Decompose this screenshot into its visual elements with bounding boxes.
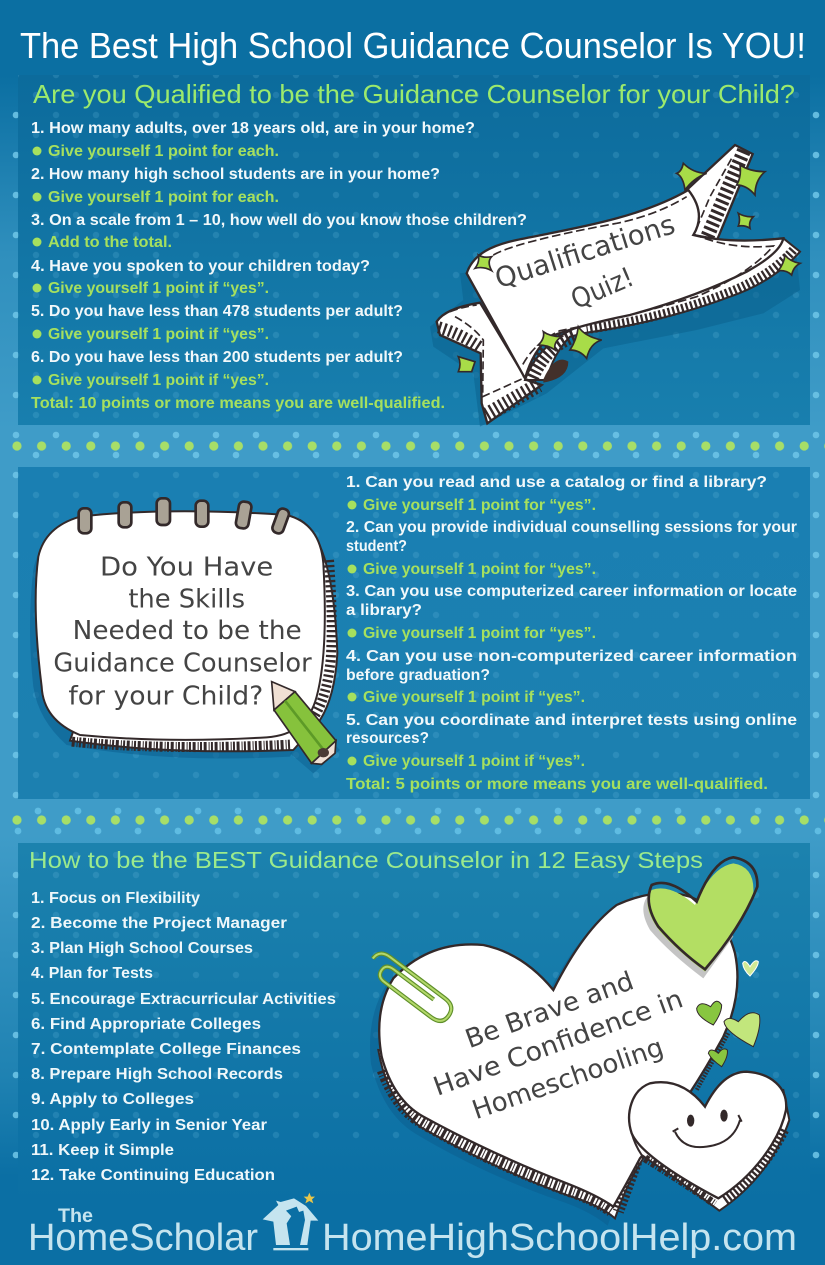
notebook text: Do You Have (100, 553, 273, 583)
main heart shadow (370, 900, 730, 1226)
quiz questions list: Add to the total. (48, 234, 172, 251)
connector strings (697, 1033, 728, 1090)
skills questions list (346, 474, 797, 793)
notebook: Do You Have the Skills (30, 498, 340, 773)
skills questions list: Give yourself 1 point for “yes”. (363, 625, 596, 642)
notebook text: the Skills (128, 584, 245, 614)
dotted divider: first (0, 440, 825, 452)
skills questions list: a library? (346, 602, 422, 619)
hearts illustration (366, 857, 789, 1226)
small green hearts (697, 961, 760, 1067)
ribbon shadow (430, 240, 800, 427)
heart text: Have Confidence in (429, 984, 687, 1103)
green sparkles (458, 163, 800, 372)
quiz questions list: 4. Have you spoken to your children today? (31, 258, 370, 275)
skills questions list: 3. Can you use computerized career information or locate (346, 583, 797, 600)
quiz questions list: Total: 10 points or more means you are well-qualified. (31, 395, 445, 412)
heart text (429, 966, 687, 1126)
quiz questions list: Give yourself 1 point for each. (48, 189, 279, 206)
quiz questions list: 1. How many adults, over 18 years old, are in your home? (31, 120, 475, 137)
curl shadow (543, 360, 568, 383)
ribbon: Qualifications Quiz (430, 145, 800, 427)
skills questions list: 1. Can you read and use a catalog or find a library? (346, 474, 767, 491)
quiz questions list: 6. Do you have less than 200 students per adult? (31, 349, 403, 366)
main heart body (379, 893, 737, 1207)
steps list: 10. Apply Early in Senior Year (31, 1117, 267, 1134)
steps list: 4. Plan for Tests (31, 965, 153, 982)
skills questions list: resources? (346, 730, 429, 747)
icon: house with star (263, 1193, 318, 1250)
skills questions list: student? (346, 538, 407, 555)
notebook page (36, 511, 325, 740)
main body (467, 190, 783, 378)
back tail top right (687, 145, 753, 239)
heart text: Homeschooling (469, 1032, 667, 1126)
skills questions list: Give yourself 1 point for “yes”. (363, 561, 596, 578)
notebook text (53, 553, 312, 711)
quiz questions list: 3. On a scale from 1 – 10, how well do you know those children? (31, 212, 527, 229)
footer logo: The HomeScholar: The (58, 1206, 93, 1227)
quiz questions list: 2. How many high school students are in your home? (31, 166, 440, 183)
footer logo: The HomeScholar: HomeScholar (28, 1217, 258, 1259)
quiz questions list: Give yourself 1 point if “yes”. (48, 280, 269, 297)
small heart (629, 1072, 789, 1211)
ribbon text: Qualifications (491, 209, 679, 295)
notebook shadow (30, 523, 333, 758)
skills questions list: before graduation? (346, 667, 490, 684)
quiz questions list (31, 120, 527, 412)
quiz questions list: Give yourself 1 point if “yes”. (48, 372, 269, 389)
main heart stripes (378, 1050, 643, 1218)
steps list: 8. Prepare High School Records (31, 1066, 283, 1083)
steps list: 7. Contemplate College Finances (31, 1041, 301, 1058)
steps list: 2. Become the Project Manager (31, 915, 287, 932)
dotted divider: second (0, 808, 825, 834)
skills questions list: Give yourself 1 point for “yes”. (363, 497, 596, 514)
steps list: 5. Encourage Extracurricular Activities (31, 991, 336, 1008)
notebook text: Guidance Counselor (53, 649, 312, 679)
heading: 12 easy steps: How to be the BEST Guidance Counselor in 12 Easy Steps (29, 847, 703, 873)
steps list (31, 890, 336, 1184)
stitching (493, 197, 773, 367)
heading: qualified: Are you Qualified to be the Guidance Counselor for your Child? (33, 79, 795, 109)
quiz questions list: 5. Do you have less than 478 students per adult? (31, 303, 403, 320)
icon: pencil (272, 682, 340, 773)
skills questions list: 5. Can you coordinate and interpret tests using online (346, 712, 797, 729)
steps list: 1. Focus on Flexibility (31, 890, 200, 907)
hatched underside (525, 238, 800, 380)
icon: paperclip (366, 949, 456, 1025)
panel: steps background (18, 843, 810, 1200)
notebook text: for your Child? (68, 681, 263, 711)
title: The Best High School Guidance Counselor Is YOU! (20, 25, 806, 66)
smiley face (687, 1115, 694, 1127)
panel: skills background (18, 467, 810, 799)
notebook text: Needed to be the (73, 616, 302, 646)
panel: qualifications background (18, 75, 810, 425)
spiral rings (79, 498, 290, 535)
steps list: 12. Take Continuing Education (31, 1167, 275, 1184)
steps list: 11. Keep it Simple (31, 1142, 174, 1159)
skills questions list: 2. Can you provide individual counselling sessions for your (346, 519, 797, 536)
heart text: Be Brave and (461, 966, 638, 1055)
steps list: 3. Plan High School Courses (31, 940, 253, 957)
footer website: HomeHighSchoolHelp.com (322, 1217, 797, 1259)
steps list: 6. Find Appropriate Colleges (31, 1016, 261, 1033)
green heart (643, 857, 757, 978)
ribbon text: Quiz! (567, 262, 639, 316)
notebook stripes (70, 520, 337, 751)
skills questions list: 4. Can you use non-computerized career information (346, 648, 797, 665)
steps list: 9. Apply to Colleges (31, 1091, 194, 1108)
quiz questions list: Give yourself 1 point if “yes”. (48, 326, 269, 343)
back fold left (437, 303, 542, 423)
skills questions list: Give yourself 1 point if “yes”. (363, 689, 585, 706)
skills questions list: Give yourself 1 point if “yes”. (363, 753, 585, 770)
skills questions list: Total: 5 points or more means you are well-qualified. (346, 776, 768, 793)
footer logo: The HomeScholar (28, 1193, 318, 1259)
quiz questions list: Give yourself 1 point for each. (48, 143, 279, 160)
